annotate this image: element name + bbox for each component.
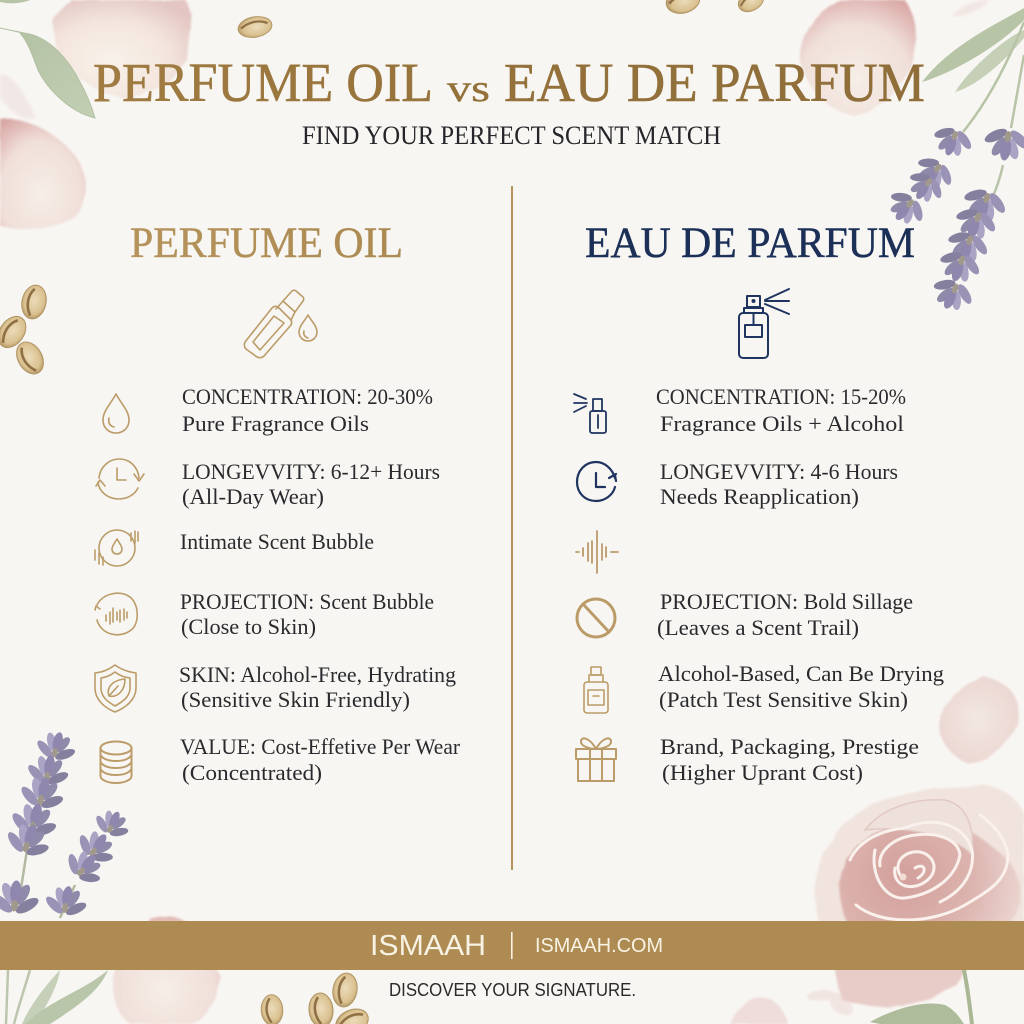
icon: oil roller bottle with drop [244,290,317,358]
title: EAU DE PARFUM [504,52,925,113]
decoration: right pale petal [938,677,1019,763]
icon: drop [103,394,129,433]
text: skin: Alcohol-Based, Can Be Drying [658,661,944,686]
title: vs [447,68,490,110]
text: concentration [182,384,433,436]
text: projection: (Leaves a Scent Trail) [657,615,859,640]
row: concentration [574,384,906,436]
text: value [180,734,461,785]
row: projection [95,589,434,639]
icon: shield with leaf [95,665,136,712]
icon: large spray bottle [739,289,789,358]
icon: scent bubble [95,530,138,566]
text: value: (Higher Uprant Cost) [662,760,863,785]
decoration: bottom-left lavender and leaves [0,727,136,1024]
text: concentration: CONCENTRATION: 15-20% [656,384,906,409]
decoration: top beans [663,0,768,17]
icon: small spray [574,394,606,433]
text: concentration [656,384,906,436]
text: projection [657,589,913,640]
text: longevity: LONGEVVITY: 6-12+ Hours [182,459,440,484]
icon: coin stack [100,742,132,783]
row: value [100,734,461,785]
heading: eau de parfum: EAU DE PARFUM [585,220,915,267]
text: skin: (Sensitive Skin Friendly) [181,687,410,712]
row: skin [584,661,944,713]
subtitle: FIND YOUR PERFECT SCENT MATCH [302,121,721,150]
text: skin: (Patch Test Sensitive Skin) [659,687,908,712]
icon: clock with arrows [96,459,144,499]
panel: eau de parfum column [574,289,944,785]
row: skin [95,662,456,712]
icon: projection circle [95,593,137,635]
icon: prohibited circle [577,599,615,637]
row: concentration [103,384,433,436]
footer band [0,921,1024,970]
title: PERFUME OIL [93,52,433,113]
text: projection: PROJECTION: Bold Sillage [660,589,913,614]
row: projection [577,589,913,640]
icon: sound wave [576,531,618,573]
text: value: (Concentrated) [182,760,322,785]
decoration: bottom beans [260,971,372,1024]
text: value [660,734,919,785]
center divider [511,186,513,870]
text: scent bubble: Intimate Scent Bubble [180,529,374,554]
tagline: DISCOVER YOUR SIGNATURE. [389,979,636,1000]
icon: alcohol bottle [584,667,608,713]
row: longevity [577,459,898,509]
row: value [576,734,919,785]
text: projection [180,589,434,639]
text: longevity [660,459,898,509]
decoration: rose [730,785,1024,1024]
title [93,52,925,113]
text: longevity [182,459,440,509]
row: longevity [96,459,440,509]
text: projection: (Close to Skin) [181,614,316,639]
text: concentration: CONCENTRATION: 20-30% [182,384,433,409]
text: projection: PROJECTION: Scent Bubble [180,589,434,614]
decoration: bottom petal [113,916,220,1024]
text: concentration: Pure Fragrance Oils [182,411,369,436]
decoration: top-right petal and lavender [800,0,1024,318]
text: longevity: Needs Reapplication) [660,484,859,509]
icon: gift box [576,738,616,781]
panel: perfume oil column [95,290,461,785]
row: scent bubble [95,529,374,566]
text: concentration: Fragrance Oils + Alcohol [660,411,904,436]
heading: perfume oil: PERFUME OIL [130,220,403,267]
text: skin [658,661,944,712]
text: skin [179,662,456,712]
text: longevity: LONGEVVITY: 4-6 Hours [660,459,898,484]
website: ISMAAH.COM [535,935,663,957]
text: longevity: (All-Day Wear) [182,484,324,509]
decoration: left beans [0,283,49,379]
text: value: Brand, Packaging, Prestige [660,734,919,759]
text: skin: SKIN: Alcohol-Free, Hydrating [179,662,456,687]
decoration: top-left petals, leaf and bean [0,0,274,229]
icon: clock navy [577,462,616,501]
brand name: ISMAAH [370,930,486,962]
text: value: VALUE: Cost-Effetive Per Wear [180,734,461,759]
